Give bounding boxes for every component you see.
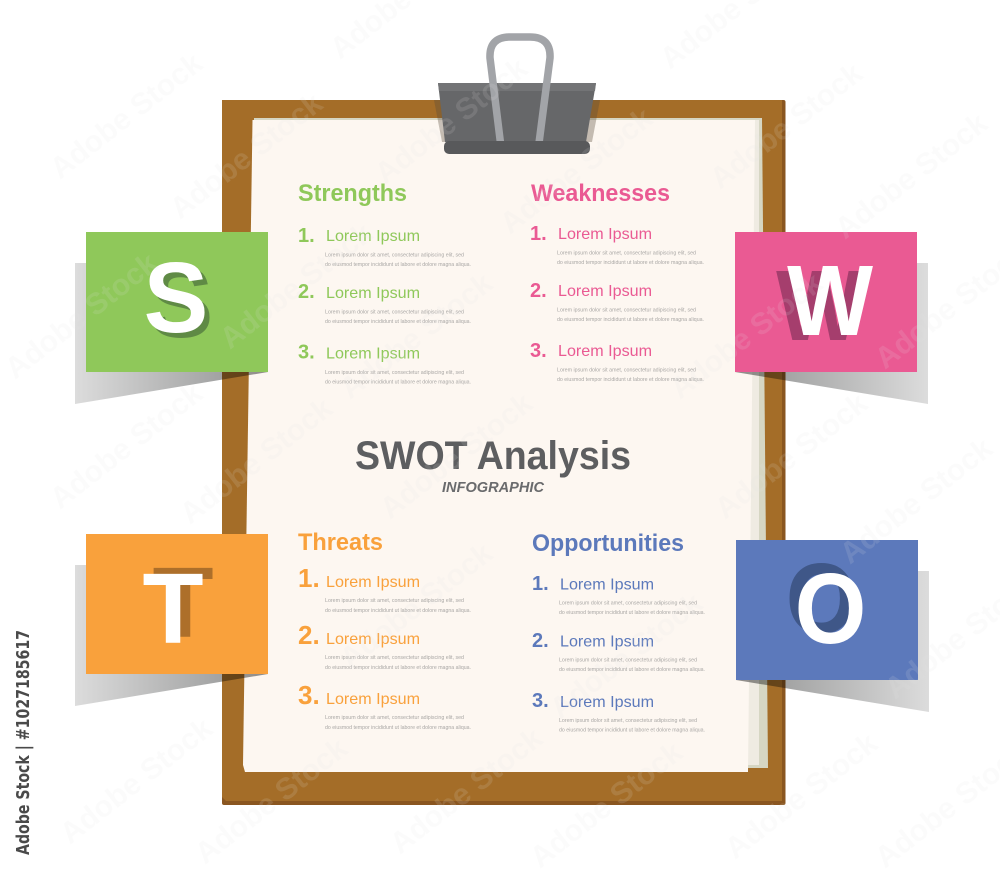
strengths item 2: Lorem ipsum dolor sit amet, consectetur adipiscing elit, sed	[325, 310, 464, 316]
weaknesses item 1: 1.	[530, 223, 547, 245]
flag: O: O	[786, 543, 857, 655]
panel: threats	[298, 529, 471, 731]
heading: Weaknesses: Weaknesses	[531, 180, 670, 207]
weaknesses item 1: Lorem Ipsum	[558, 226, 652, 243]
threats item 1: do eiusmod tempor incididunt ut labore et dolore magna aliqua.	[325, 608, 471, 614]
text: Adobe Stock	[384, 721, 549, 861]
title	[355, 434, 631, 496]
text: Adobe Stock	[719, 726, 884, 866]
flag: T: T	[152, 547, 214, 659]
weaknesses item 3: do eiusmod tempor incididunt ut labore et dolore magna aliqua.	[557, 377, 704, 383]
threats item 1: Lorem ipsum dolor sit amet, consectetur adipiscing elit, sed	[325, 598, 464, 604]
weaknesses item 3: Lorem Ipsum	[558, 343, 652, 360]
flag: T	[75, 534, 268, 706]
opportunities item 1	[532, 573, 705, 616]
text: Adobe Stock	[44, 376, 209, 516]
weaknesses item 3	[530, 340, 704, 383]
text: Adobe Stock	[44, 46, 209, 186]
opportunities item 3: 3.	[532, 690, 549, 712]
threats item 1: Lorem Ipsum	[326, 574, 420, 591]
stock id caption: Adobe Stock | #1027185617	[13, 630, 34, 855]
text: Adobe Stock	[164, 86, 329, 226]
opportunities item 2: Lorem Ipsum	[560, 634, 654, 650]
text: Adobe Stock	[544, 586, 709, 726]
binder clip	[434, 37, 600, 154]
strengths item 1: do eiusmod tempor incididunt ut labore et dolore magna aliqua.	[325, 262, 471, 268]
threats item 2: Lorem Ipsum	[326, 631, 420, 648]
flag: W: W	[776, 250, 863, 362]
strengths item 1: 1.	[298, 225, 315, 247]
weaknesses item 1: do eiusmod tempor incididunt ut labore et dolore magna aliqua.	[557, 260, 704, 266]
strengths item 3: 3.	[298, 342, 315, 364]
text: Adobe Stock	[334, 536, 499, 676]
threats item 3: Lorem Ipsum	[326, 691, 420, 708]
threats item 3	[298, 680, 471, 731]
opportunities item 1: do eiusmod tempor incididunt ut labore et dolore magna aliqua.	[559, 610, 705, 616]
threats item 3: do eiusmod tempor incididunt ut labore et dolore magna aliqua.	[325, 725, 471, 731]
threats item 3: Lorem ipsum dolor sit amet, consectetur adipiscing elit, sed	[325, 715, 464, 721]
opportunities item 2: 2.	[532, 630, 549, 652]
text: Adobe Stock	[189, 731, 354, 869]
flag: S	[75, 232, 268, 404]
opportunities item 2	[532, 630, 705, 673]
text: Adobe Stock	[214, 216, 379, 356]
strengths item 2: do eiusmod tempor incididunt ut labore et dolore magna aliqua.	[325, 319, 471, 325]
weaknesses item 2: Lorem ipsum dolor sit amet, consectetur adipiscing elit, sed	[557, 308, 696, 314]
opportunities item 3: do eiusmod tempor incididunt ut labore et dolore magna aliqua.	[559, 728, 705, 734]
threats item 3: 3.	[298, 680, 320, 710]
paper stack	[243, 118, 768, 772]
threats item 2: Lorem ipsum dolor sit amet, consectetur adipiscing elit, sed	[325, 655, 464, 661]
strengths item 2: 2.	[298, 281, 315, 303]
weaknesses item 3: 3.	[530, 340, 547, 362]
heading: Opportunities: Opportunities	[532, 530, 684, 557]
strengths item 2: Lorem Ipsum	[326, 285, 420, 302]
text: Adobe Stock	[829, 106, 994, 246]
heading: Threats: Threats	[298, 529, 383, 556]
threats item 2: 2.	[298, 620, 320, 650]
opportunities item 1: Lorem Ipsum	[560, 576, 654, 594]
title: INFOGRAPHIC	[442, 480, 545, 496]
weaknesses item 2: 2.	[530, 280, 547, 302]
opportunities item 3: Lorem ipsum dolor sit amet, consectetur adipiscing elit, sed	[559, 718, 697, 724]
strengths item 1: Lorem ipsum dolor sit amet, consectetur adipiscing elit, sed	[325, 252, 464, 258]
text: Adobe Stock	[54, 711, 219, 851]
opportunities item 1: 1.	[532, 573, 549, 595]
opportunities item 3	[532, 690, 705, 734]
text: Adobe Stock	[374, 386, 539, 526]
opportunities item 1: Lorem ipsum dolor sit amet, consectetur adipiscing elit, sed	[559, 600, 697, 606]
opportunities item 2: Lorem ipsum dolor sit amet, consectetur adipiscing elit, sed	[559, 658, 697, 664]
strengths item 3: Lorem Ipsum	[326, 346, 420, 362]
flag: S: S	[149, 247, 213, 358]
text: Adobe Stock	[709, 386, 874, 526]
flag: T: T	[142, 553, 204, 665]
threats item 1	[298, 563, 471, 614]
flag: O	[736, 540, 929, 712]
threats item 1: 1.	[298, 563, 320, 593]
strengths item 3: Lorem ipsum dolor sit amet, consectetur adipiscing elit, sed	[325, 370, 464, 376]
text: Adobe Stock	[834, 431, 999, 571]
text: Adobe Stock	[174, 391, 339, 531]
threats item 2	[298, 620, 471, 671]
strengths item 2	[298, 281, 471, 325]
text: Adobe Stock	[494, 101, 659, 241]
clipboard board	[222, 100, 786, 805]
panel: strengths	[298, 180, 471, 386]
flag: W: W	[787, 245, 874, 357]
opportunities item 2: do eiusmod tempor incididunt ut labore et dolore magna aliqua.	[559, 667, 705, 673]
threats item 2: do eiusmod tempor incididunt ut labore et dolore magna aliqua.	[325, 665, 471, 671]
weaknesses item 2: Lorem Ipsum	[558, 283, 652, 300]
strengths item 3: do eiusmod tempor incididunt ut labore et dolore magna aliqua.	[325, 380, 471, 386]
text: Adobe Stock	[334, 266, 499, 406]
weaknesses item 1	[530, 223, 704, 266]
panel: weaknesses	[530, 180, 704, 383]
flag: O: O	[795, 553, 866, 665]
weaknesses item 1: Lorem ipsum dolor sit amet, consectetur adipiscing elit, sed	[557, 250, 696, 256]
strengths item 1: Lorem Ipsum	[326, 228, 420, 245]
text: Adobe Stock	[0, 246, 164, 386]
heading: Strengths: Strengths	[298, 180, 407, 207]
text: Adobe Stock	[664, 266, 829, 406]
title: SWOT Analysis	[355, 434, 631, 478]
text: Adobe Stock	[704, 56, 869, 196]
text: Adobe Stock	[369, 51, 534, 191]
opportunities item 3: Lorem Ipsum	[560, 694, 654, 711]
strengths item 1	[298, 225, 471, 268]
weaknesses item 2	[530, 280, 704, 323]
strengths item 3	[298, 342, 471, 386]
weaknesses item 3: Lorem ipsum dolor sit amet, consectetur adipiscing elit, sed	[557, 368, 696, 374]
flag: W	[735, 232, 928, 404]
panel: opportunities	[532, 530, 705, 734]
weaknesses item 2: do eiusmod tempor incididunt ut labore et dolore magna aliqua.	[557, 317, 704, 323]
flag: S: S	[144, 242, 208, 353]
